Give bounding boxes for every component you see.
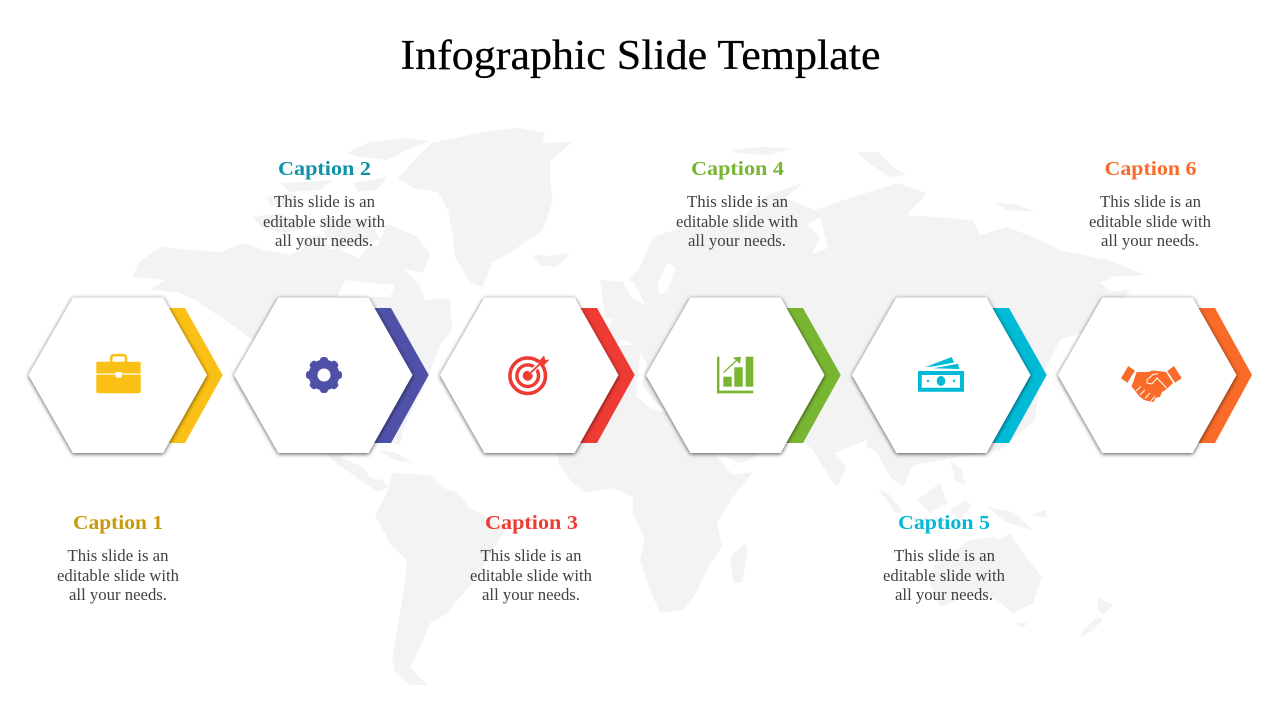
caption 1: editable slide with bbox=[57, 566, 180, 585]
caption 2: This slide is an bbox=[274, 192, 375, 211]
caption 6: This slide is an bbox=[1100, 192, 1201, 211]
caption 4: all your needs. bbox=[688, 231, 786, 250]
caption 2 bbox=[263, 159, 386, 250]
title: Infographic Slide Template bbox=[400, 33, 880, 79]
caption 6: editable slide with bbox=[1089, 212, 1212, 231]
caption 3 bbox=[470, 513, 593, 604]
icon: target with arrow bbox=[510, 356, 550, 394]
caption 5 bbox=[883, 513, 1006, 604]
icon: briefcase bbox=[96, 355, 141, 393]
step 5: chevron and hexagon bbox=[852, 298, 1047, 453]
icon: handshake bbox=[1121, 366, 1182, 402]
caption 4: This slide is an bbox=[687, 192, 788, 211]
caption 3: editable slide with bbox=[470, 566, 593, 585]
step 6: chevron and hexagon bbox=[1058, 298, 1252, 453]
caption 6: all your needs. bbox=[1101, 231, 1199, 250]
world map background bbox=[133, 128, 1147, 685]
caption 4: editable slide with bbox=[676, 212, 799, 231]
caption 3: Caption 3 bbox=[485, 513, 578, 534]
caption 5: This slide is an bbox=[894, 546, 995, 565]
caption 2: Caption 2 bbox=[278, 159, 371, 180]
caption 5: all your needs. bbox=[895, 585, 993, 604]
caption 2: editable slide with bbox=[263, 212, 386, 231]
step 1: chevron and hexagon bbox=[28, 298, 223, 453]
caption 1: all your needs. bbox=[69, 585, 167, 604]
step 2: chevron and hexagon bbox=[234, 298, 429, 453]
icon: gear bbox=[306, 357, 342, 393]
icon: banknotes bbox=[918, 357, 964, 392]
step 4: chevron and hexagon bbox=[646, 298, 841, 453]
caption 3: all your needs. bbox=[482, 585, 580, 604]
caption 6: Caption 6 bbox=[1104, 159, 1197, 180]
caption 1: This slide is an bbox=[68, 546, 168, 565]
icon: rising bar chart bbox=[717, 357, 753, 393]
caption 2: all your needs. bbox=[275, 231, 373, 250]
caption 4: Caption 4 bbox=[691, 159, 784, 180]
caption 1 bbox=[57, 513, 180, 604]
caption 1: Caption 1 bbox=[73, 513, 163, 534]
caption 5: editable slide with bbox=[883, 566, 1006, 585]
caption 6 bbox=[1089, 159, 1212, 250]
caption 5: Caption 5 bbox=[898, 513, 990, 534]
caption 3: This slide is an bbox=[480, 546, 582, 565]
step 3: chevron and hexagon bbox=[440, 298, 635, 453]
caption 4 bbox=[676, 159, 799, 250]
